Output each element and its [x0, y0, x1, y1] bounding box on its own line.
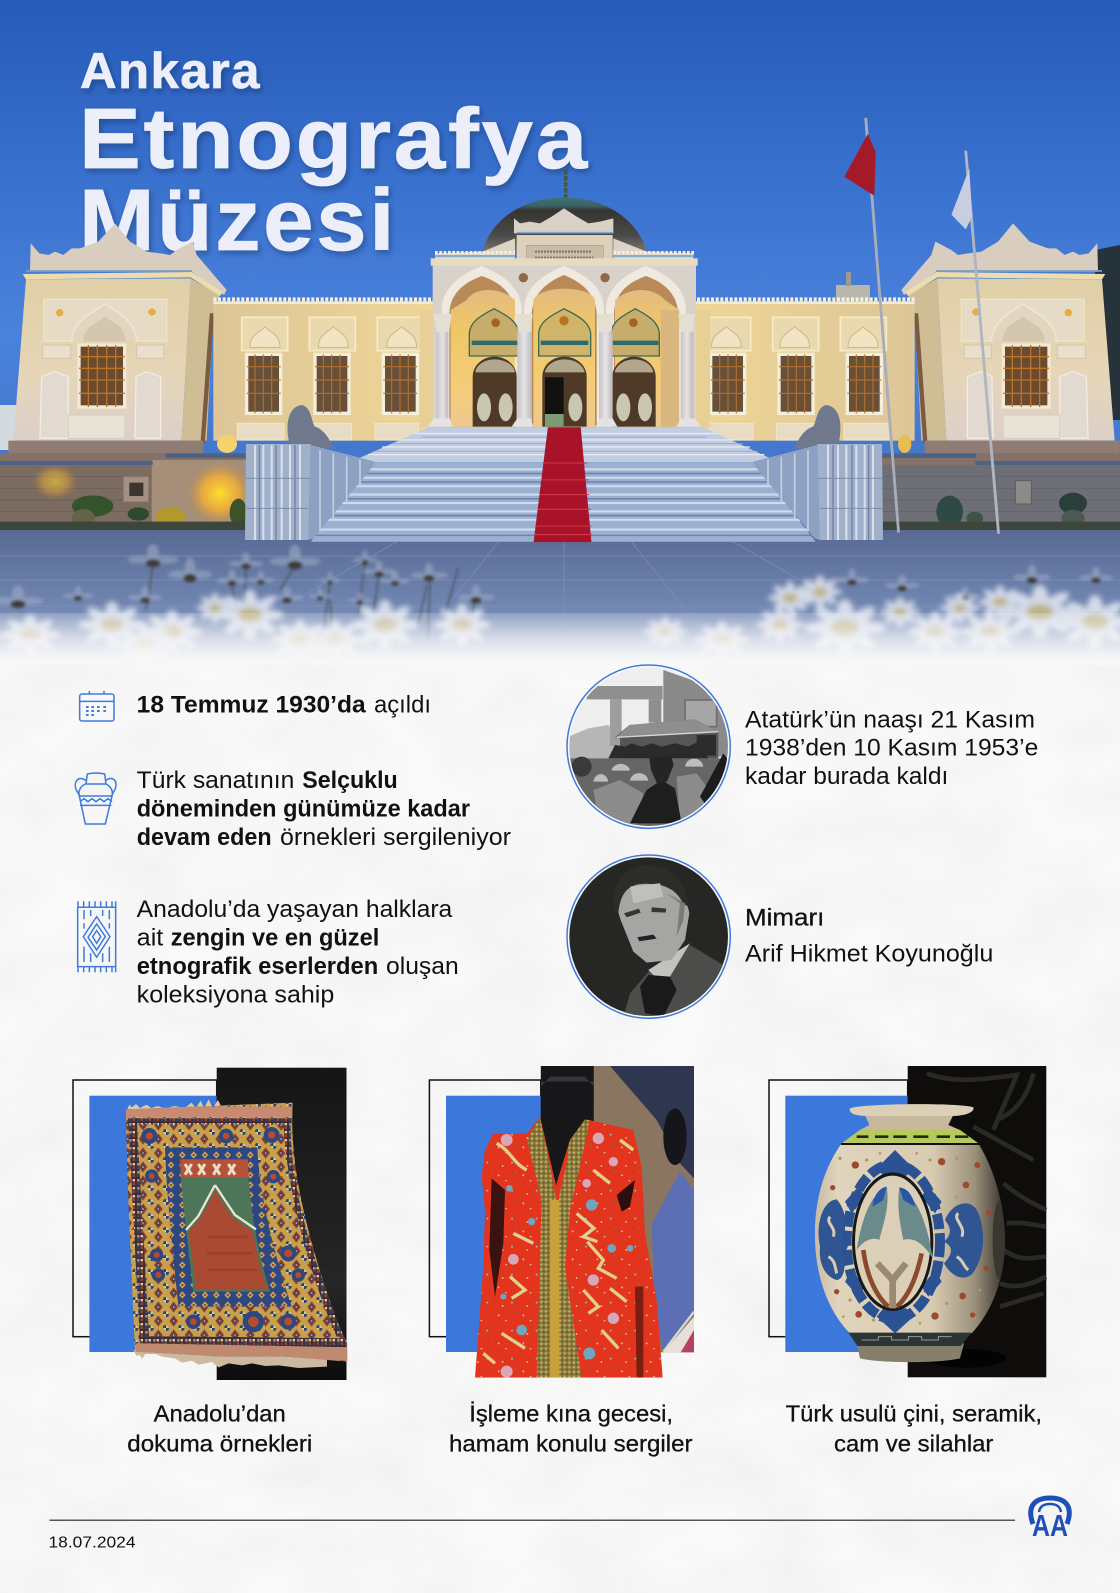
daisies: [0, 544, 1120, 652]
text: Atatürk's body: kadar burada kaldı: [745, 763, 948, 790]
central medallion: [847, 1164, 940, 1319]
fact: ethnographic collection: [78, 896, 459, 1008]
carpet: [120, 1099, 353, 1368]
dress: [470, 1113, 670, 1380]
background trees and neighbour building: [0, 245, 1120, 450]
text: Seljuk to present: Türk sanatının: [137, 767, 294, 794]
foot band: [848, 1333, 972, 1346]
blue block: [89, 1096, 217, 1352]
upper steps: [350, 427, 779, 462]
text: opening date: 18 Temmuz 1930’da: [137, 692, 366, 719]
columns: [427, 314, 701, 427]
border medallions: [141, 1127, 305, 1332]
stars: [830, 1158, 991, 1320]
caption: carpet: [127, 1401, 312, 1456]
left stair plinth and lion: [245, 405, 375, 540]
caption: ceramics: Türk usulü çini, seramik,: [786, 1401, 1042, 1427]
embroidery: [483, 1140, 633, 1363]
dark backdrop: [908, 1066, 1046, 1377]
logo: Anadolu Agency: [1031, 1498, 1069, 1543]
dome: [483, 170, 647, 252]
photo: Atatürk's funeral: [567, 665, 732, 828]
text: Atatürk's body: 1938’den 10 Kasım 1953’e: [745, 735, 1038, 762]
portico: [587, 686, 663, 699]
facade right half: [695, 223, 1120, 453]
text: ethnographic collection: Anadolu’da yaşayan halklara: [137, 896, 453, 923]
mihrab: [188, 1190, 268, 1290]
stained glass: [469, 309, 659, 356]
side medallions: [819, 1199, 848, 1280]
text: Seljuk to present: Selçuklu: [302, 767, 398, 794]
text: ethnographic collection: [137, 896, 459, 1008]
central portal: [420, 208, 710, 427]
caption: dress: hamam konulu sergiler: [449, 1430, 693, 1456]
vase: [815, 1104, 1007, 1362]
frame: [429, 1080, 541, 1337]
title: Müzesi: [79, 172, 397, 269]
dark backdrop: [217, 1068, 346, 1380]
painted backdrop: [594, 1066, 694, 1352]
collar band: [842, 1130, 978, 1143]
blue frame: [165, 1147, 292, 1307]
fade into page: [0, 613, 1120, 665]
text: ethnographic collection: koleksiyona sahip: [137, 981, 334, 1008]
blue block: [785, 1096, 908, 1352]
date: 18.07.2024: [48, 1534, 136, 1551]
doors: [473, 357, 517, 427]
hero photo: museum at dusk: [0, 0, 1120, 665]
photo: Arif Hikmet Koyunoğlu portrait: [567, 855, 731, 1018]
catafalque: [615, 719, 718, 758]
faint wall calligraphy: [927, 1073, 1046, 1307]
ground: [0, 530, 1120, 665]
text: Atatürk's body: Atatürk’ün naaşı 21 Kasım: [745, 706, 1035, 733]
text: opening date: açıldı: [374, 692, 431, 719]
gold front bands: [527, 1117, 557, 1378]
sleeve gaps: [489, 1178, 505, 1297]
arches: [442, 266, 522, 427]
red carpet: [534, 427, 591, 542]
facade left half: [8, 223, 433, 453]
text: Atatürk's body: [745, 706, 1038, 790]
text: Seljuk to present: [137, 767, 511, 851]
caption: ceramics: [786, 1401, 1042, 1456]
text: ethnographic collection: zengin ve en güzel: [171, 924, 379, 951]
table shadow: [927, 1349, 1006, 1368]
mannequin and backdrop: [541, 1066, 594, 1353]
crowd: [568, 758, 730, 827]
text: ethnographic collection: oluşan: [386, 953, 459, 980]
text: ethnographic collection: ait: [137, 924, 164, 951]
panel: embroidered dress exhibit: [429, 1066, 694, 1380]
lower steps: [311, 462, 816, 542]
title: Ankara: [80, 43, 261, 99]
icon: calendar: [80, 691, 114, 721]
spandrel wall: [433, 266, 696, 427]
fact: opening date: [80, 691, 431, 721]
blue block: [446, 1096, 541, 1352]
hill: [568, 725, 618, 765]
caption: carpet: dokuma örnekleri: [127, 1430, 312, 1456]
lower walls: [0, 435, 253, 531]
caption: dress: İşleme kına gecesi,: [469, 1401, 673, 1427]
title: [79, 43, 590, 269]
paving lines: [0, 542, 1120, 610]
sky: [0, 0, 1120, 540]
wall: [663, 670, 730, 757]
text: Seljuk to present: örnekleri sergileniyor: [280, 824, 511, 851]
text: ethnographic collection: etnografik eserlerden: [137, 953, 378, 980]
logo: Anadolu Agency: AA: [1032, 1508, 1068, 1543]
icon: carpet: [78, 901, 116, 972]
caption: carpet: Anadolu’dan: [154, 1401, 286, 1427]
flag poles and flags: [844, 118, 999, 534]
captions: [127, 1401, 1042, 1456]
panel: carpet exhibit: [73, 1068, 353, 1380]
right stair plinth and lion: [753, 405, 883, 540]
panel: ceramic vase exhibit: [769, 1066, 1046, 1377]
steps: [311, 427, 816, 542]
caption: ceramics: cam ve silahlar: [834, 1430, 994, 1456]
frame: [769, 1080, 908, 1337]
icon: jar: [75, 773, 116, 824]
frame: [73, 1080, 217, 1337]
title: Etnografya: [79, 92, 590, 187]
fact: Seljuk to present: [75, 767, 511, 851]
text: Seljuk to present: devam eden: [137, 824, 272, 851]
green field: [180, 1159, 270, 1292]
birds: [857, 1187, 888, 1250]
text: architect: [745, 905, 993, 968]
caption: dress: [449, 1401, 693, 1456]
mannequin neck: [541, 1077, 594, 1087]
text: architect: Arif Hikmet Koyunoğlu: [745, 941, 993, 968]
text: architect: Mimarı: [745, 905, 824, 932]
entablature: [435, 251, 694, 254]
text: Seljuk to present: döneminden günümüze kadar: [137, 796, 470, 823]
pediment: [435, 208, 693, 267]
